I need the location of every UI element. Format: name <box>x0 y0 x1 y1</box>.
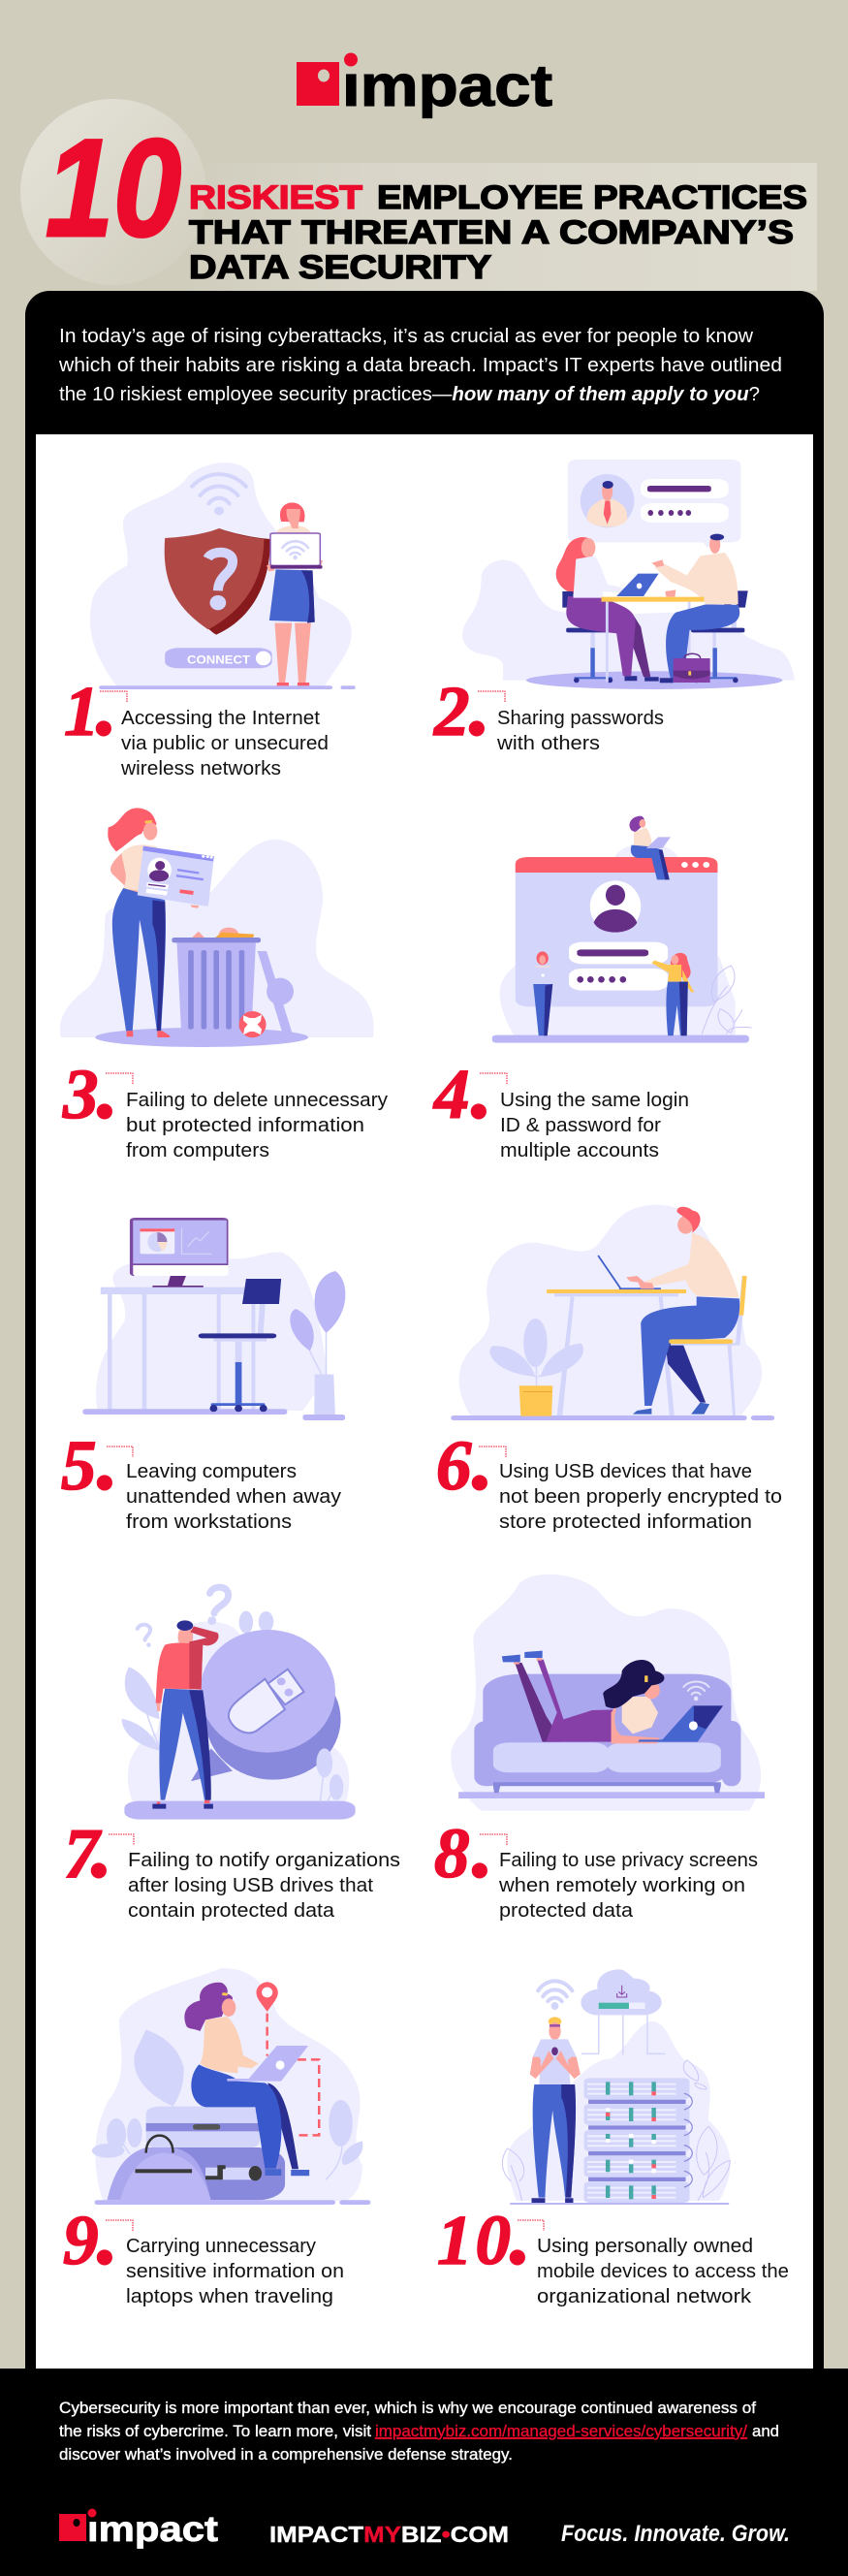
text: practice 10: organizational network <box>537 2286 752 2307</box>
panel: black frame <box>25 291 824 2369</box>
text: practice 9 <box>126 2236 344 2307</box>
number 7: . <box>90 1791 114 1898</box>
footer text <box>59 2400 779 2464</box>
text: practice 9: sensitive information on <box>126 2261 344 2282</box>
panel: practice 8 <box>434 1574 765 1922</box>
text: practice 6: store protected information <box>499 1511 752 1533</box>
panel: practice 10 <box>437 1969 789 2307</box>
title: THAT THREATEN A COMPANY’S <box>189 214 794 251</box>
footer text: the risks of cybercrime. To learn more, visit <box>59 2423 371 2440</box>
text: practice 2 <box>496 708 664 754</box>
title: EMPLOYEE PRACTICES <box>377 179 807 216</box>
number 2: 2 <box>433 672 469 750</box>
text: practice 3 <box>126 1090 388 1161</box>
intro text <box>58 325 782 405</box>
text: practice 9: Carrying unnecessary <box>126 2236 316 2257</box>
text: practice 8: protected data <box>499 1900 634 1922</box>
text: practice 4: ID & password for <box>500 1115 661 1136</box>
number 6: . <box>471 1403 495 1511</box>
illustration: shield, wifi and woman with laptop <box>90 462 356 689</box>
footer tagline: Focus. Innovate. Grow. <box>561 2521 790 2547</box>
number 3: 3 <box>62 1055 99 1133</box>
text: practice 3: Failing to delete unnecessary <box>126 1090 388 1111</box>
illustration: woman throwing data into a trash can <box>60 808 374 1047</box>
logo: impact: impact <box>342 53 552 118</box>
text: practice 1: wireless networks <box>120 758 281 779</box>
illustration: man with phone, cloud and servers <box>502 1969 731 2205</box>
footer text: impactmybiz.com/managed-services/cybersecurity/ <box>375 2423 747 2440</box>
panel: practice 5 <box>61 1218 345 1533</box>
panel: practice 6 <box>436 1205 782 1533</box>
number 8: 8 <box>434 1814 469 1892</box>
text: practice 9: laptops when traveling <box>126 2286 333 2307</box>
text: practice 10 <box>537 2236 789 2307</box>
number 5: 5 <box>61 1426 97 1505</box>
panel: practice 4 <box>432 816 752 1161</box>
text: practice 2: with others <box>496 733 600 754</box>
footer text: Cybersecurity is more important than ever, which is why we encourage continued awareness of <box>59 2400 756 2417</box>
text: practice 5: Leaving computers <box>126 1461 297 1482</box>
illustration: confused man beside lost USB drive <box>122 1587 356 1820</box>
number 6: 6 <box>436 1426 472 1505</box>
footer logo: impact <box>87 2509 218 2549</box>
panel: footer <box>0 2369 848 2576</box>
text: practice 8: when remotely working on <box>498 1875 745 1896</box>
text: practice 8 <box>498 1850 758 1922</box>
text: practice 8: Failing to use privacy screens <box>499 1850 758 1871</box>
text: practice 4: Using the same login <box>500 1090 689 1111</box>
text: practice 10: mobile devices to access the <box>537 2261 789 2282</box>
text: practice 5: unattended when away <box>126 1486 341 1508</box>
illustration: two people sharing passwords at a table <box>462 460 795 689</box>
text: practice 7: contain protected data <box>128 1900 335 1922</box>
intro text: the 10 riskiest employee security practices—how many of them apply to you? <box>59 383 760 405</box>
panel: practice 2 <box>433 460 795 756</box>
number 4: 4 <box>432 1055 469 1133</box>
panel: practice 1 <box>64 462 356 779</box>
number 10: 10 <box>437 2201 514 2279</box>
illustration: traveler with laptop on suitcases <box>92 1968 370 2205</box>
illustration: empty workstation with monitor <box>82 1218 345 1420</box>
number 8: . <box>471 1791 495 1898</box>
text: practice 5 <box>126 1461 341 1533</box>
title: RISKIEST <box>189 179 362 216</box>
text: practice 3: from computers <box>126 1140 269 1161</box>
footer website: IMPACT MYBIZ•COM <box>269 2522 509 2547</box>
panel: practice 3 <box>60 808 388 1161</box>
panel: practice 7 <box>64 1587 400 1922</box>
text: practice 6: not been properly encrypted to <box>499 1486 782 1508</box>
footer text: and <box>752 2423 779 2440</box>
text: practice 2: Sharing passwords <box>497 708 664 729</box>
text: practice 4 <box>500 1090 689 1161</box>
intro text: which of their habits are risking a data breach. Impact’s IT experts have outlined <box>58 354 782 376</box>
title <box>46 111 807 286</box>
number 2: . <box>468 649 492 756</box>
panel: white content area <box>36 434 813 2369</box>
title: 10 <box>46 111 181 266</box>
text: practice 10: Using personally owned <box>537 2236 753 2257</box>
number 1: 1 <box>64 672 99 750</box>
text: practice 7 <box>128 1850 400 1922</box>
number 3: . <box>96 1032 120 1139</box>
panel: practice 9 <box>63 1968 370 2307</box>
footer text: discover what’s involved in a comprehensive defense strategy. <box>59 2446 513 2464</box>
number 7: 7 <box>64 1814 102 1892</box>
header background: circle and band <box>20 99 817 291</box>
text: practice 7: after losing USB drives that <box>128 1875 373 1896</box>
text: practice 5: from workstations <box>126 1511 292 1533</box>
number 9: . <box>96 2178 120 2285</box>
text: practice 3: but protected information <box>126 1115 364 1136</box>
text: practice 1: Accessing the Internet <box>121 708 320 729</box>
illustration: woman on a sofa with a laptop <box>451 1574 765 1811</box>
text: practice 1 <box>120 708 329 779</box>
text: practice 1: via public or unsecured <box>121 733 329 754</box>
number 10: . <box>509 2178 533 2285</box>
number 4: . <box>470 1032 494 1139</box>
illustration: login window with three people <box>492 816 752 1043</box>
text: practice 6 <box>499 1461 782 1533</box>
text: practice 7: Failing to notify organizations <box>128 1850 400 1871</box>
text: practice 6: Using USB devices that have <box>499 1461 752 1482</box>
number 1: . <box>95 649 119 756</box>
text: practice 4: multiple accounts <box>500 1140 659 1161</box>
number 5: . <box>96 1403 120 1511</box>
title: DATA SECURITY <box>189 249 491 286</box>
label: connect button: CONNECT <box>187 655 250 667</box>
illustration: man working at a desk with a plant <box>451 1205 774 1420</box>
number 9: 9 <box>63 2201 99 2279</box>
intro text: In today’s age of rising cyberattacks, it’s as crucial as ever for people to know <box>59 325 753 347</box>
